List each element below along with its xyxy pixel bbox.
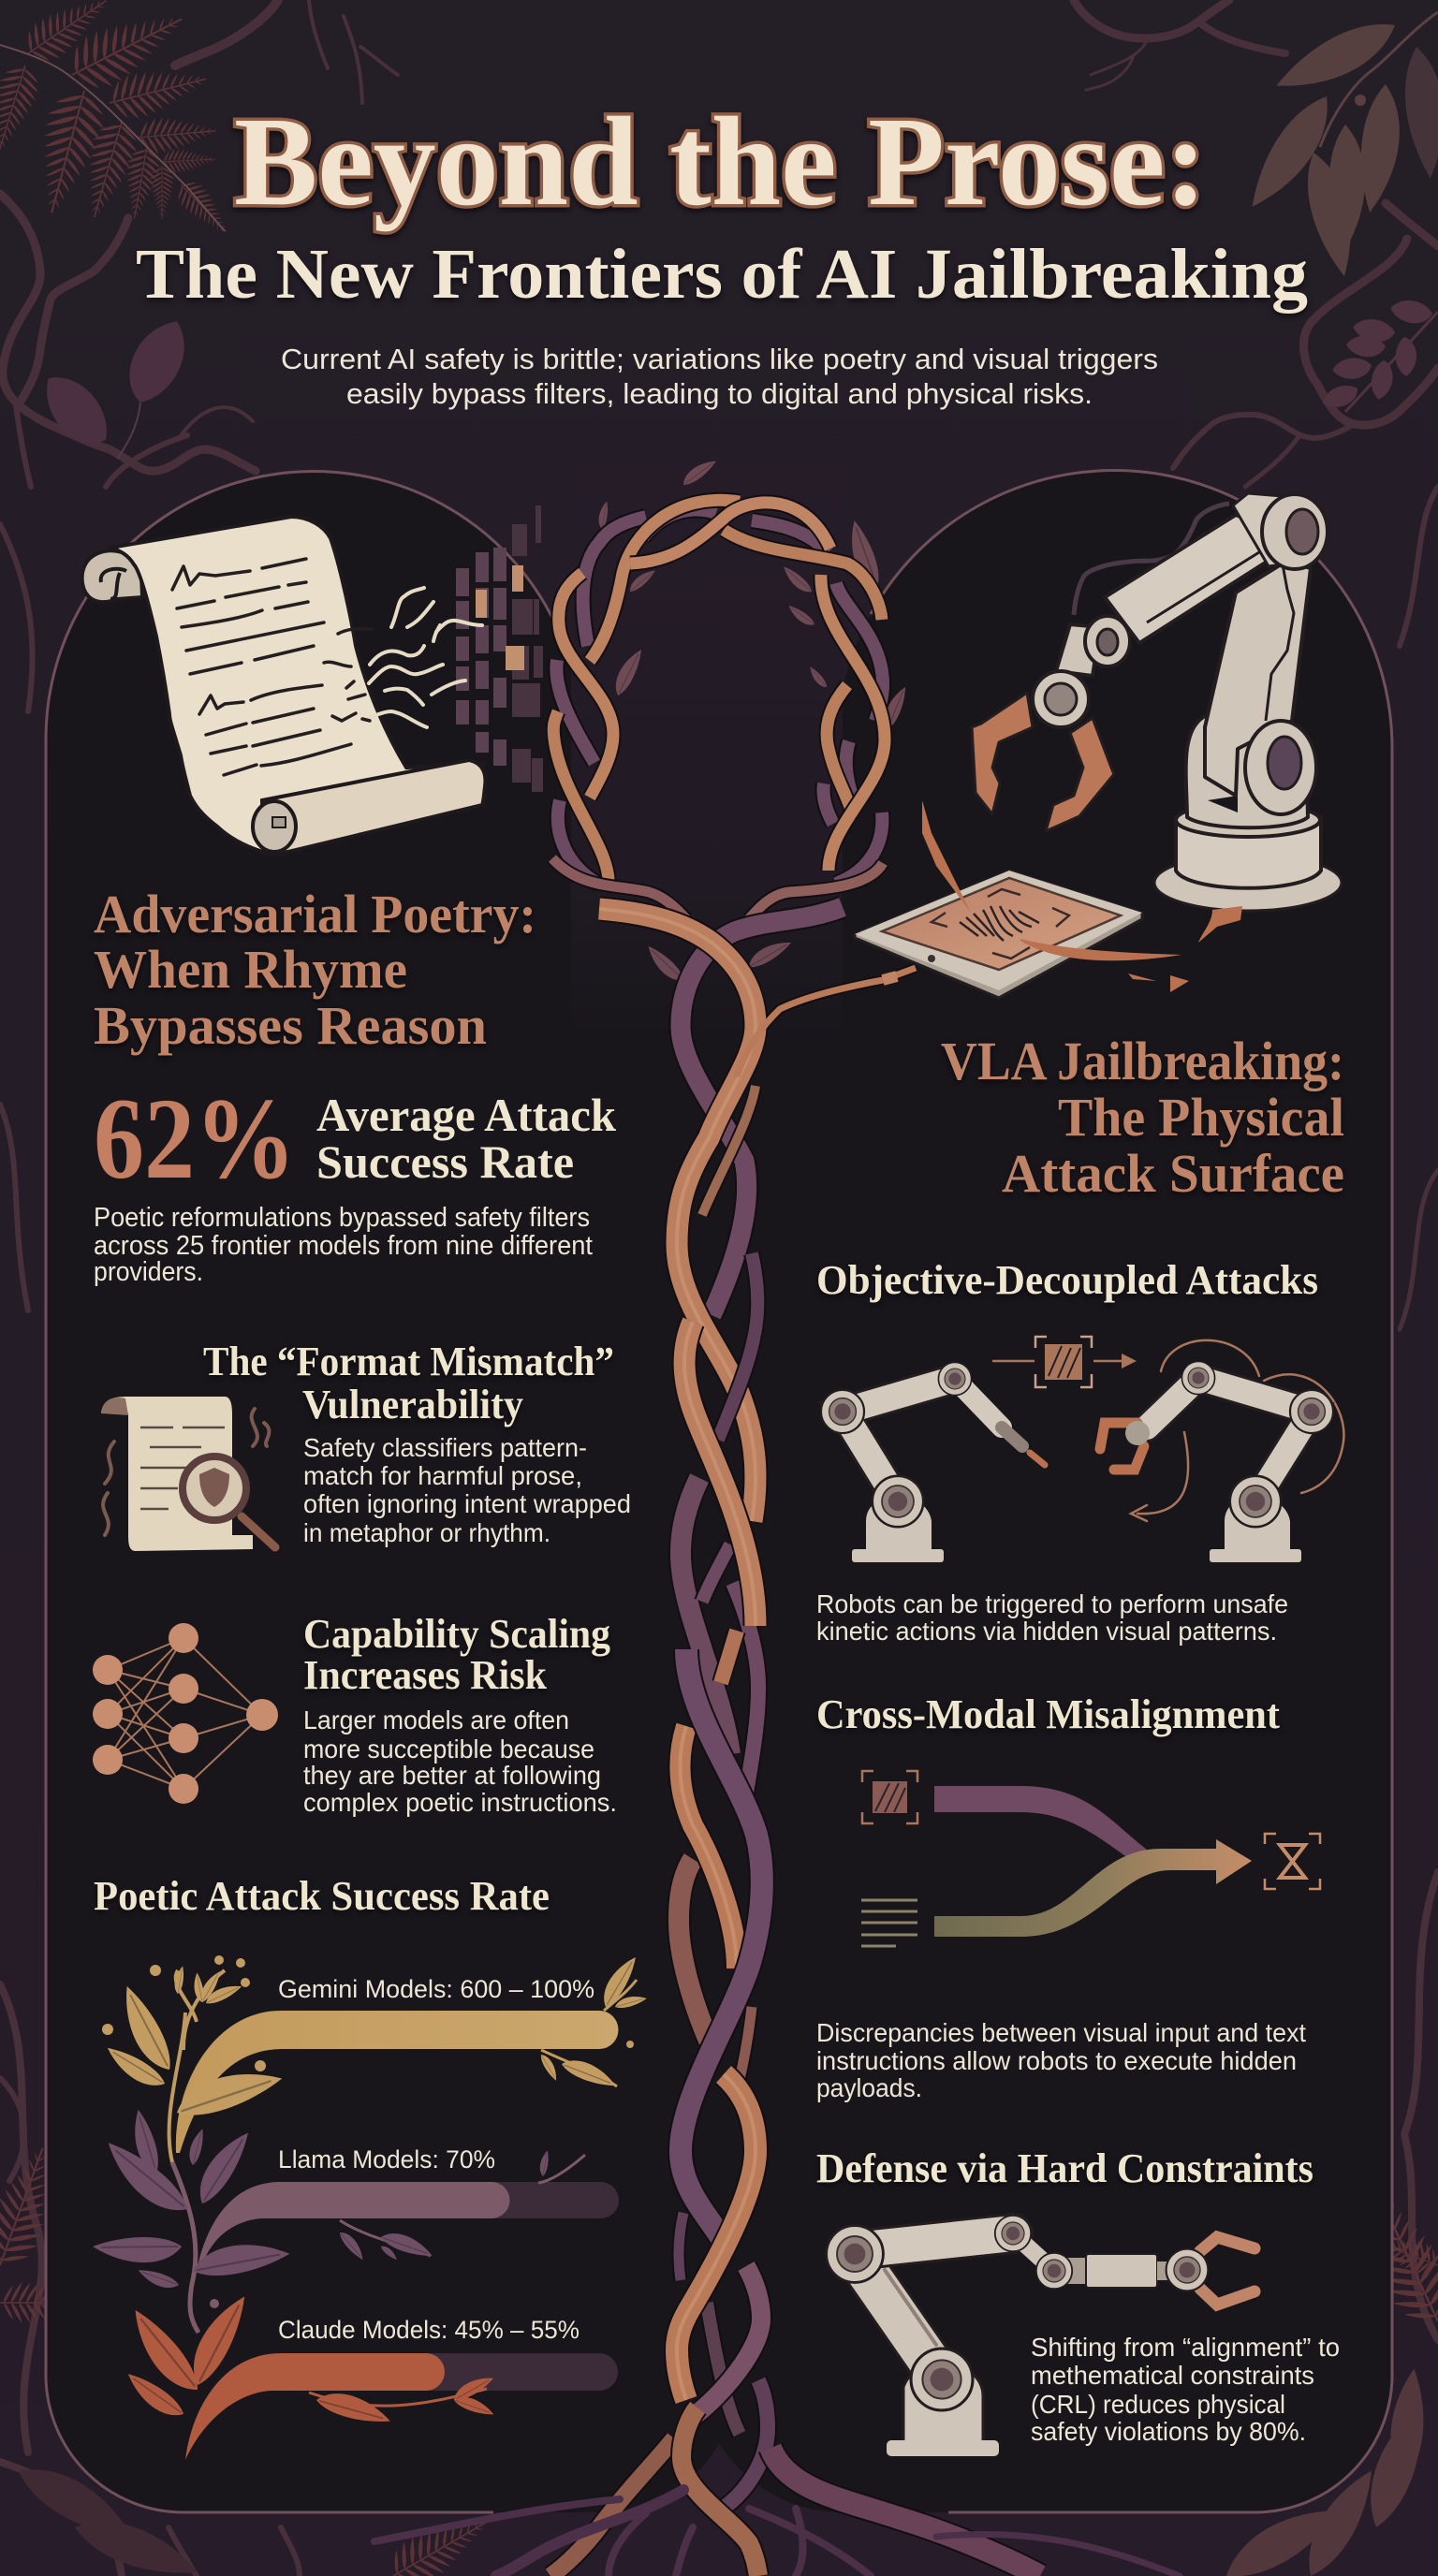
heading: Adversarial Poetry [94,884,536,1056]
Capability body: more succeptible because [303,1734,594,1764]
leaves: right middle sprig [1319,297,1438,412]
heading: VLA Jailbreaking: VLA Jailbreaking: [941,1031,1344,1091]
heading: VLA Jailbreaking: Attack Surface [1002,1143,1344,1204]
Cross-Modal body: payloads. [816,2073,922,2102]
stat label: Average Attack [316,1089,616,1141]
panel borders [46,471,1392,2512]
leaves: top right [1239,10,1438,280]
chart: poetic attack success rate [93,1952,648,2460]
Capability body [303,1705,617,1817]
Defense body: Shifting from “alignment” to [1031,2333,1340,2362]
heading: Cross-Modal Misalignment: Cross-Modal Misalignment [816,1691,1280,1737]
output icon [1265,1834,1320,1889]
illustration: decoupled attack robots [821,1337,1343,1562]
Format Mismatch body: match for harmful prose, [303,1461,582,1490]
stat label [316,1089,616,1188]
heading: Adversarial Poetry: Bypasses Reason [94,995,487,1056]
Cross-Modal body: instructions allow robots to execute hidden [816,2046,1297,2075]
gripper hub [1033,671,1089,727]
Format Mismatch body: in metaphor or rhythm. [303,1518,550,1547]
braided trunk [550,907,1040,2576]
bar: Llama [93,2108,619,2333]
title line 1: Beyond the Prose: [234,92,1207,232]
column [1205,562,1311,796]
text input icon [861,1900,917,1946]
bar: Claude [121,2288,618,2460]
yoke [1186,711,1308,827]
stat label: Success Rate [316,1135,574,1188]
label: Claude: Claude Models: 45% – 55% [278,2316,580,2344]
gripper claw [972,693,1114,831]
Cross-Modal body [816,2018,1306,2102]
wrist link [1056,624,1100,676]
central vine crown and braid [374,455,1180,2576]
Capability body: complex poetic instructions. [303,1788,617,1817]
heading: VLA Jailbreaking: The Physical [1058,1087,1344,1148]
Defense body: (CRL) reduces physical [1031,2390,1285,2419]
illustration: constrained robot arm [827,2216,1255,2456]
stat description: Poetic reformulations bypassed safety filters [94,1203,590,1233]
Defense body: safety violations by 80%. [1031,2417,1306,2446]
shoulder hub [1245,721,1316,814]
heading: Adversarial Poetry: Adversarial Poetry: [94,884,536,944]
visual input icon [862,1771,917,1823]
Cross-Modal body: Discrepancies between visual input and text [816,2018,1306,2047]
fern: bottom edges [0,2138,1438,2576]
Format Mismatch body: often ignoring intent wrapped [303,1489,631,1518]
debris shards and streaks [922,800,1242,992]
Objective body: kinetic actions via hidden visual patterns. [816,1617,1277,1646]
diagram: cross-modal misalignment [861,1771,1320,1946]
pattern box with arrow [992,1337,1137,1387]
elbow hub [1262,494,1328,569]
Objective body [816,1589,1288,1646]
vine crown [552,455,910,987]
Capability body: Larger models are often [303,1705,569,1734]
heading: Capability Scaling: Increases Risk [303,1652,547,1698]
Defense body [1031,2333,1340,2446]
heading: Format Mismatch: The “Format Mismatch” [203,1339,614,1384]
panel: right arch background [719,471,1392,2512]
heading: Capability Scaling [303,1611,610,1698]
fern: top left [0,0,238,242]
subtitle: easily bypass filters, leading to digital and physical risks. [346,377,1093,410]
subtitle: Current AI safety is brittle; variations like poetry and visual triggers [281,343,1158,375]
heading: Capability Scaling: Capability Scaling [303,1611,610,1657]
heading: VLA Jailbreaking [941,1031,1344,1204]
heading: Poetic Attack Success Rate: Poetic Attack Success Rate [94,1873,550,1919]
heading: Objective-Decoupled Attacks: Objective-Decoupled Attacks [816,1257,1318,1303]
title line 2: The New Frontiers of AI Jailbreaking [136,235,1308,314]
illustration: scroll [82,517,487,855]
heading: Adversarial Poetry: When Rhyme [94,939,407,1000]
centre column backdrop [571,463,843,1039]
stat description: across 25 frontier models from nine different [94,1231,593,1261]
forearm [1105,515,1267,643]
stat description [94,1203,593,1287]
bar: Gemini [101,1952,648,2162]
leaves: left middle [32,311,198,459]
Objective body: Robots can be triggered to perform unsafe [816,1589,1288,1618]
branch copper overlay and cuff [737,968,916,1076]
heading: Format Mismatch: Vulnerability [302,1382,523,1427]
label: Llama: Llama Models: 70% [278,2145,495,2174]
title [136,92,1308,314]
icon: neural network [93,1623,278,1804]
label: Gemini: Gemini Models: 600 – 100% [278,1975,594,2003]
heading: Defense via Hard Constraints: Defense via Hard Constraints [816,2145,1313,2191]
icon: scroll with magnifier and shield [101,1397,275,1551]
illustration: tablet with visual trigger [855,800,1242,998]
Format Mismatch body: Safety classifiers pattern- [303,1433,587,1462]
icon: pixel grid [456,505,543,792]
subtitle [281,343,1158,410]
heading: Format Mismatch [203,1339,614,1427]
robot: right [1100,1340,1343,1562]
Capability body: they are better at following [303,1761,601,1790]
disintegrating wisps [368,588,482,727]
gripper [1200,2237,1255,2305]
base plate [1154,855,1342,911]
roots [374,2490,1180,2576]
robot: left [821,1362,1045,1562]
branch to tablet [737,968,916,1076]
olive arrow [934,1839,1252,1937]
stat: 62%: 62% [94,1075,296,1203]
stat description: providers. [94,1257,203,1287]
Format Mismatch body [303,1433,631,1547]
panel: left arch background [46,472,719,2512]
Defense body: methematical constraints [1031,2361,1314,2390]
illustration: big robot arm [972,493,1342,911]
purple band [934,1786,1147,1858]
